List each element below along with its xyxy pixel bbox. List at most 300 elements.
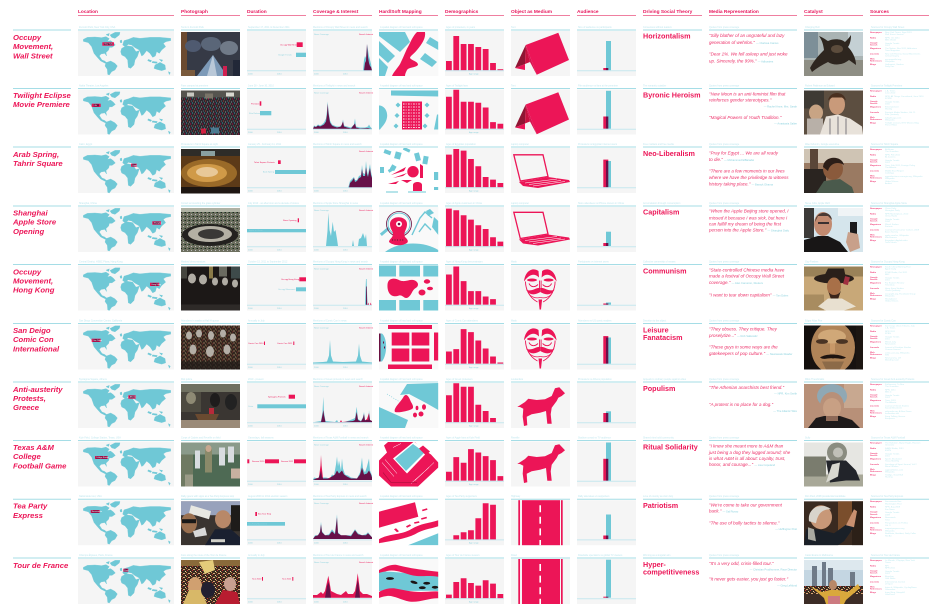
duration chart: 2000 bbox=[248, 484, 253, 486]
event title: Apple Store bbox=[12, 218, 57, 227]
media representation quotes: person into the Apple Store." — Shanghai Daily bbox=[708, 228, 790, 233]
media representation quotes: reinforces gender stereotypes." bbox=[709, 98, 772, 103]
driving social theory: The romantic outsider bbox=[643, 84, 666, 88]
sources list: Web bbox=[870, 293, 875, 295]
column headers bbox=[78, 9, 929, 16]
sources list: Radio bbox=[870, 507, 877, 509]
location map: Syntagma Square, Athens bbox=[79, 378, 108, 381]
duration chart: Occupy Movement bbox=[278, 288, 296, 291]
coverage and interest area chart: News Coverage bbox=[314, 561, 330, 564]
event title: Texas A&M bbox=[13, 443, 54, 452]
coverage and interest area chart: Search Interest bbox=[359, 33, 374, 36]
driving social theory: Love of country as civic duty bbox=[643, 495, 674, 498]
sources list: Time Asia bbox=[885, 284, 895, 287]
object: Guy Fawkes mask bbox=[511, 320, 570, 370]
catalyst: cyclist with city skyline bbox=[804, 554, 863, 604]
hard/soft map: A spatial diagram of hard and soft space bbox=[380, 320, 423, 322]
sources list: Newspaper bbox=[870, 560, 882, 562]
coverage area chart: Mentions of Apple Store Shanghai in news bbox=[313, 202, 359, 205]
driving social theory: Devotion to the object bbox=[643, 320, 666, 322]
event title: Anti-austerity bbox=[12, 385, 63, 394]
sources list: Web bbox=[870, 58, 875, 60]
duration chart: 2000 bbox=[248, 250, 253, 252]
sources list: apple.com/cn, Wikipedia bbox=[885, 235, 909, 237]
coverage and interest area chart: Mentions of Occupy Wall Street in news and search bbox=[313, 26, 368, 29]
sources list: Sources for Tour de France bbox=[871, 554, 901, 557]
catalyst: cyclist with city skyline: Cadel Evans in Melbourne bbox=[805, 554, 834, 557]
media representation quotes: Quotes from press coverage bbox=[709, 84, 740, 88]
sources list: NPR, All Things Considered, June 2010 bbox=[885, 95, 924, 98]
sources list: teapartyexpress.org bbox=[885, 527, 905, 530]
demographics bars: Ages of Greek protesters bbox=[446, 378, 473, 381]
event title: Movie Premiere bbox=[13, 100, 71, 109]
sources list: KAMU Radio, 2011 bbox=[885, 447, 904, 450]
duration chart bbox=[247, 436, 306, 486]
coverage and interest area chart bbox=[313, 495, 374, 545]
sources list: Hot Air bbox=[885, 534, 892, 537]
event title: Protests, bbox=[13, 394, 46, 403]
sources list: Sources for Comic Con bbox=[871, 320, 896, 322]
driving social theory bbox=[643, 378, 702, 393]
catalyst: painting bbox=[804, 260, 863, 310]
sources list: References bbox=[870, 588, 883, 590]
coverage and interest area chart: News Coverage bbox=[314, 502, 330, 505]
sources list: Blogs bbox=[870, 240, 877, 242]
media representation quotes: Quotes from press coverage bbox=[709, 143, 740, 146]
photograph: podium crowd bbox=[181, 554, 240, 604]
location map bbox=[78, 260, 174, 310]
demographics bars: Age range bbox=[469, 131, 479, 134]
sources list: Far Eastern Review bbox=[885, 282, 905, 284]
demographics bars: Ages of protesters, in years bbox=[446, 26, 476, 29]
sources list: occupywallst.org bbox=[885, 58, 902, 61]
media representation quotes: Quotes from press coverage bbox=[709, 260, 740, 264]
location map: Kyle Field, College Station, Texas, USA bbox=[79, 436, 121, 440]
sources list: Search bbox=[870, 397, 878, 399]
object: highway: Road bbox=[511, 554, 517, 557]
media representation quotes: "It's a very odd, crisis-filled tour." bbox=[709, 561, 774, 566]
media representation quotes: "When the Apple Beijing store opened, I bbox=[709, 209, 789, 214]
demographics bars bbox=[445, 320, 504, 370]
demographics bars: Age range bbox=[469, 483, 479, 486]
sources list: Al Jazeera bbox=[885, 156, 896, 159]
sources list: BBC World bbox=[885, 39, 897, 42]
hard/soft map bbox=[379, 554, 439, 604]
sources list bbox=[870, 26, 929, 68]
sources list: Washington Post bbox=[885, 502, 902, 505]
sources list: San Diego Union Tribune, July bbox=[885, 324, 915, 328]
duration chart: 2000 bbox=[248, 543, 253, 545]
sources list: Time, 2011 bbox=[885, 400, 896, 402]
sources list: Newspaper bbox=[870, 384, 882, 386]
sources list: 2009 bbox=[885, 514, 891, 516]
location map: Cairo, Egypt bbox=[79, 143, 92, 146]
duration chart: Arab Spring bbox=[263, 171, 275, 174]
media representation quotes: — NPR, Kim Smith bbox=[774, 391, 797, 395]
hard/soft map: A spatial diagram of hard and soft space bbox=[380, 554, 423, 557]
sources list: Wall Street Journal bbox=[885, 33, 904, 36]
sources list: Perez Hilton bbox=[885, 124, 898, 127]
sources list: References bbox=[870, 295, 883, 297]
sources list: References bbox=[870, 178, 883, 180]
sources list: Blogs bbox=[870, 181, 877, 183]
sources list: Blogs bbox=[870, 64, 877, 66]
coverage area chart: News Coverage bbox=[314, 326, 330, 330]
hard/soft map bbox=[379, 26, 439, 76]
sources list: Web bbox=[870, 469, 875, 471]
sources list bbox=[870, 260, 929, 303]
coverage and interest area chart: Search Interest bbox=[359, 268, 374, 270]
duration chart: Store Opening bbox=[283, 219, 297, 222]
sources list: Sources for Shanghai Apple Store bbox=[871, 202, 908, 205]
sources list: KCRW bbox=[885, 98, 893, 100]
event title: San Deigo bbox=[13, 326, 51, 335]
sources list: Magazines bbox=[870, 458, 882, 460]
hard/soft map: A spatial diagram of hard and soft space bbox=[380, 202, 423, 205]
sources list: Jadaliyya bbox=[885, 173, 895, 175]
catalyst: portrait: Wael Ghonim, Google executive bbox=[805, 143, 840, 146]
sources list: Entertainment bbox=[885, 106, 899, 108]
sources list: Radio bbox=[870, 331, 877, 333]
sources list: Middle East Report bbox=[885, 170, 904, 172]
sources list: Radio bbox=[870, 272, 877, 274]
location map: Champs-Élysées, Paris, France bbox=[79, 554, 113, 557]
sources list: Radio bbox=[870, 154, 877, 156]
sources list: L.A. Times bbox=[885, 327, 896, 330]
sources list: Blogs bbox=[870, 416, 877, 418]
location map: New York bbox=[104, 43, 113, 46]
sources list bbox=[870, 495, 929, 537]
object: laptop: Laptop computer bbox=[511, 202, 529, 205]
coverage area chart bbox=[313, 320, 374, 370]
duration chart: 2000 bbox=[248, 74, 253, 76]
demographics bars: Ages of Twilight fans bbox=[446, 84, 469, 88]
media representation quotes: proselytize..." — Rob Salkowitz bbox=[708, 333, 758, 338]
sources list: NPR 2011 bbox=[885, 331, 896, 333]
duration chart: Syntagma Protests bbox=[268, 396, 286, 398]
column headers: Object as Medium bbox=[511, 9, 552, 15]
column headers: Catalyst bbox=[804, 9, 823, 15]
coverage and interest area chart: Search Interest bbox=[359, 502, 374, 505]
sources list: Journal of Consumer Culture, 2009 bbox=[885, 228, 920, 232]
hard/soft map: A spatial diagram of hard and soft space bbox=[380, 436, 423, 440]
sources list: Global Voices bbox=[885, 181, 899, 183]
row: Occupy Movement, Hong Kong bbox=[13, 260, 929, 310]
sources list: Velonation bbox=[885, 588, 896, 591]
duration chart bbox=[247, 554, 306, 604]
sources list: Enetpress bbox=[885, 417, 896, 420]
event title: Occupy bbox=[13, 33, 42, 42]
coverage and interest area chart: Mentions of Tahrir Square in news and search bbox=[313, 143, 362, 146]
sources list: Google bbox=[870, 277, 878, 279]
media representation quotes: "There are a few moments in our lives bbox=[709, 168, 785, 173]
sources list: Radio bbox=[870, 448, 877, 450]
sources list: Newsarama, io9 bbox=[885, 356, 902, 360]
sources list: Twilight Lexicon, MTV Movies Blog bbox=[885, 122, 920, 124]
sources list: Newspaper bbox=[870, 32, 882, 34]
location map: Zuccotti Park, New York City, USA bbox=[79, 26, 116, 29]
coverage and interest area chart bbox=[313, 436, 374, 486]
duration chart: Tour 2010 bbox=[252, 578, 262, 580]
photograph: square at night bbox=[181, 143, 240, 194]
driving social theory: Appeals to ordinary people against elites bbox=[643, 378, 687, 381]
sources list: Google Trends bbox=[885, 276, 900, 280]
duration chart: Comic Con 2010 bbox=[248, 343, 264, 345]
catalyst: portrait bbox=[804, 84, 863, 134]
sources list: Wikipedia bbox=[885, 530, 895, 532]
media representation quotes: "I knew she meant more to A&M than bbox=[709, 444, 784, 449]
media representation quotes bbox=[709, 84, 798, 126]
driving social theory: Collective ownership of means bbox=[643, 260, 676, 264]
sources list: Search bbox=[870, 162, 878, 164]
hard/soft map bbox=[379, 260, 439, 310]
sources list: Magazines bbox=[870, 224, 882, 226]
sources list: Magazines bbox=[870, 517, 882, 519]
coverage and interest area chart bbox=[313, 143, 374, 193]
driving social theory: Winning as a singular aim bbox=[643, 554, 670, 557]
location map: Nokia Theatre, Los Angeles bbox=[79, 84, 109, 88]
driving social theory: Populism bbox=[643, 384, 675, 393]
sources list: Engadget, AppleInsider bbox=[885, 239, 908, 242]
driving social theory: competitiveness bbox=[643, 567, 699, 576]
column headers: Hard/Soft Mapping bbox=[379, 9, 422, 15]
duration chart bbox=[247, 320, 306, 370]
driving social theory: Shared rites build community bbox=[643, 436, 675, 440]
location map: San Diego bbox=[93, 340, 102, 342]
sources list: References bbox=[870, 471, 883, 473]
duration chart: Annually in July bbox=[248, 554, 265, 557]
sources list: International Journal bbox=[885, 580, 905, 584]
hard/soft map bbox=[379, 320, 439, 370]
driving social theory: Accumulation through consumption bbox=[643, 202, 681, 205]
sources list: 2011 bbox=[885, 280, 890, 282]
driving social theory bbox=[643, 554, 702, 576]
column headers: Driving Social Theory bbox=[643, 9, 693, 15]
media representation quotes bbox=[709, 143, 797, 187]
duration chart: Apple in China bbox=[249, 229, 263, 232]
sources list: Radio bbox=[870, 96, 877, 98]
media representation quotes bbox=[709, 260, 797, 297]
sources list: VeloPress bbox=[885, 593, 896, 596]
photograph: masked protesters bbox=[181, 260, 240, 310]
sources list: 2011 bbox=[885, 573, 890, 575]
column headers: Duration bbox=[247, 9, 267, 15]
media representation quotes: where we have the priviledge to witness bbox=[709, 175, 789, 180]
event title: Opening bbox=[13, 227, 44, 236]
catalyst: Steve Jobs portrait bbox=[804, 202, 863, 252]
sources list: Google bbox=[870, 101, 878, 103]
sources list: 2011 bbox=[885, 339, 890, 341]
photograph: street protest: Riot police bbox=[181, 378, 193, 381]
event title bbox=[13, 30, 71, 60]
photograph: crowd: Fans camped at premiere bbox=[181, 84, 209, 88]
coverage and interest area chart: News Coverage bbox=[314, 268, 330, 270]
sources list: Blogs bbox=[870, 592, 877, 594]
coverage area chart: Search Interest bbox=[359, 326, 374, 330]
sources list: Time Magazine bbox=[885, 50, 901, 52]
duration chart: Season 2011 bbox=[281, 461, 294, 463]
sources list: RedState, Breitbart, Daily Caller bbox=[885, 532, 916, 535]
object: laptop bbox=[511, 202, 570, 252]
sources list: wikipedia.org, A New Dawn bbox=[885, 410, 912, 413]
sources list: Radio bbox=[870, 390, 877, 392]
column headers: Audience bbox=[577, 9, 599, 15]
media representation quotes: missed it because I was sick, but here I bbox=[709, 215, 788, 220]
media representation quotes bbox=[709, 26, 797, 63]
audience bars: Protesters vs Egyptian internet users bbox=[578, 143, 618, 146]
coverage and interest area chart: Mentions of Tea Party Express in news and search bbox=[313, 495, 367, 498]
catalyst: bull bbox=[804, 26, 863, 76]
column headers: Demographics bbox=[445, 9, 479, 15]
sources list: Velo News bbox=[885, 578, 896, 580]
photograph: crowd ring bbox=[181, 202, 240, 252]
audience bars: Film audience vs fans at the premiere bbox=[578, 84, 619, 88]
catalyst: portrait bbox=[804, 143, 863, 193]
media representation quotes: — Christian Prudhomme, Race Director bbox=[750, 568, 797, 572]
sources list: of Sport bbox=[885, 583, 893, 586]
sources list: comic-con.org, Wikipedia bbox=[885, 352, 910, 354]
media representation quotes: honor, and courage..." — Lisa Copeland bbox=[709, 462, 776, 467]
catalyst: Steve Jobs portrait: Steve Jobs, Apple CEO bbox=[805, 202, 830, 205]
sources list: KPBS bbox=[885, 333, 891, 335]
coverage and interest area chart: Search Interest bbox=[359, 561, 374, 564]
coverage and interest area chart bbox=[313, 260, 374, 310]
media representation quotes: "New Moon is an anti-feminist film that bbox=[709, 92, 786, 97]
sources list bbox=[870, 320, 929, 362]
location map bbox=[78, 84, 174, 134]
catalyst: gray statue bbox=[804, 436, 863, 486]
demographics bars: Age range bbox=[469, 190, 479, 192]
coverage and interest area chart: Mentions of Twilight in news and search bbox=[313, 84, 356, 88]
object: Guy Fawkes mask: Mask bbox=[511, 320, 518, 322]
sources list: Google bbox=[870, 336, 878, 338]
photograph: masked protesters: Masked demonstrators bbox=[181, 260, 206, 264]
media representation quotes: up. Sincerely, the 99%." — Adbusters bbox=[709, 58, 774, 63]
event title: Twilight Eclipse bbox=[13, 91, 72, 100]
sources list: BBC bbox=[885, 274, 890, 276]
location map: Paris bbox=[124, 569, 128, 572]
coverage and interest area chart: 2010 bbox=[343, 74, 348, 76]
hard/soft map: A spatial diagram of hard and soft space bbox=[380, 84, 423, 88]
sources list: NPR, Feb 2011 bbox=[885, 154, 901, 156]
sources list bbox=[870, 143, 929, 185]
coverage and interest area chart: Mentions of Tour de France in news and search bbox=[313, 554, 364, 557]
coverage and interest area chart: 2010 bbox=[343, 132, 348, 134]
audience bars: Rally attendees vs supporters bbox=[578, 495, 610, 498]
demographics bars: Age range bbox=[469, 307, 479, 310]
audience bars bbox=[577, 554, 636, 604]
sources list: References bbox=[870, 119, 883, 121]
media representation quotes: "These guys in some ways are the bbox=[709, 345, 778, 350]
audience bars bbox=[577, 320, 636, 370]
media representation quotes: Quotes from press coverage bbox=[709, 26, 740, 29]
sources list: Sources for Twilight Premiere bbox=[871, 84, 903, 88]
sources list: Chronicle bbox=[885, 444, 895, 447]
photograph: rally bbox=[181, 495, 240, 545]
sources list: TexAgs, Good Bull bbox=[885, 474, 904, 476]
event title: Comic Con bbox=[13, 335, 54, 344]
driving social theory: Byronic Heroism bbox=[643, 91, 701, 100]
sources list: References bbox=[870, 412, 883, 414]
sources list: Hong Kong Studies bbox=[885, 287, 905, 290]
photograph: corps marching: Corps of Cadets and Reveille on field bbox=[181, 436, 221, 440]
event title: International bbox=[13, 344, 60, 353]
coverage and interest area chart: Search Interest bbox=[359, 150, 374, 153]
media representation quotes: can fulfill my dream of being the first bbox=[709, 222, 782, 227]
photograph: corps marching bbox=[181, 436, 240, 486]
coverage area chart: 2000 bbox=[314, 250, 319, 252]
duration chart: September 17, 2011 to December 2011 bbox=[248, 26, 290, 29]
driving social theory bbox=[643, 143, 702, 158]
sources list: Times bbox=[885, 562, 892, 564]
event title: College bbox=[13, 452, 41, 461]
duration chart: 2000 bbox=[248, 602, 253, 604]
duration chart: 2010 bbox=[277, 250, 282, 252]
sources list: Search bbox=[870, 45, 878, 47]
sources list: Web bbox=[870, 586, 875, 588]
coverage and interest area chart: 2000 bbox=[314, 426, 319, 428]
media representation quotes: Quotes from press coverage bbox=[709, 320, 740, 322]
sources list: Newspaper bbox=[870, 266, 882, 268]
sources list: 2011 bbox=[885, 45, 890, 47]
event title: Express bbox=[13, 511, 44, 520]
sources list: Wikipedia bbox=[885, 472, 895, 474]
event title: Football Game bbox=[13, 461, 67, 470]
duration chart bbox=[247, 84, 306, 134]
coverage area chart: 2010 bbox=[343, 367, 348, 369]
audience bars bbox=[577, 26, 636, 76]
duration chart: January 25 - February 11, 2011 bbox=[248, 143, 282, 146]
duration chart: 2010 bbox=[277, 484, 282, 486]
sources list: Wired, Forbes bbox=[885, 223, 900, 226]
coverage and interest area chart: 2010 bbox=[343, 190, 348, 192]
object: Guy Fawkes mask: Mask bbox=[511, 260, 518, 264]
media representation quotes: gatekeepers of pop culture." — Newsweek Reader bbox=[709, 351, 792, 356]
sources list: Arabist bbox=[885, 182, 892, 185]
location map: San Diego Convention Center, California bbox=[79, 320, 123, 322]
location map bbox=[78, 554, 174, 604]
sources list: The Atlantic bbox=[885, 166, 897, 169]
sources list: Fortune bbox=[885, 225, 893, 228]
location map: Cairo bbox=[132, 164, 137, 167]
sources list: Bicycling bbox=[885, 576, 894, 578]
audience bars bbox=[577, 260, 636, 310]
demographics bars: Age range bbox=[469, 542, 479, 545]
media representation quotes: — Huffington Post bbox=[775, 527, 797, 531]
row: Anti-austerity Protests, Greece bbox=[12, 378, 929, 428]
media representation quotes: to die." — Mohammed ElBaradei bbox=[709, 157, 755, 162]
sources list: Radio bbox=[870, 566, 877, 568]
hard/soft map: A spatial diagram of hard and soft space bbox=[380, 378, 423, 381]
demographics bars: Ages of Comic Con attendees bbox=[446, 320, 479, 322]
sources list: Sociology of Sport Journal, Vol 2 bbox=[885, 463, 917, 466]
demographics bars bbox=[445, 202, 504, 252]
duration chart: 2010 bbox=[277, 426, 282, 428]
demographics bars: Age range bbox=[469, 424, 479, 428]
demographics bars: Ages of Aggie fans at Kyle Field bbox=[446, 436, 480, 440]
media representation quotes bbox=[708, 320, 797, 356]
demographics bars: Age range bbox=[469, 600, 479, 604]
sources list: 2011 bbox=[885, 397, 890, 399]
sources list: References bbox=[870, 236, 883, 238]
sources list: Search bbox=[870, 103, 878, 105]
sources list: Wikipedia bbox=[885, 61, 895, 63]
catalyst: portrait: Robert Pattinson as Edward bbox=[805, 84, 835, 88]
sources list: Journals bbox=[870, 230, 880, 232]
duration chart: Comic Con 2011 bbox=[277, 343, 293, 345]
location map bbox=[78, 202, 174, 252]
driving social theory bbox=[643, 320, 702, 342]
